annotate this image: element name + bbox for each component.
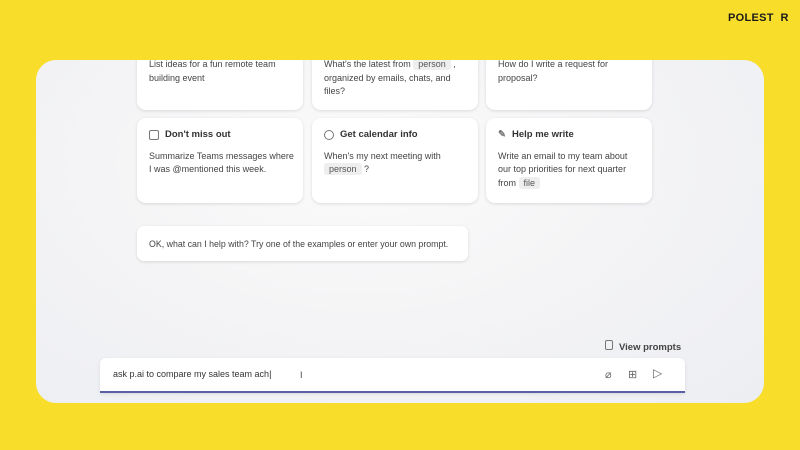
card: team building: [137, 20, 303, 110]
input box: I: [300, 370, 303, 380]
card: help me write: ✎: [498, 129, 506, 140]
panel: chat window: [36, 60, 764, 403]
card: help me write: Help me write: [512, 129, 574, 140]
card: help me write: our top priorities for next quarter: [498, 164, 626, 174]
prompt bubble: [137, 226, 468, 261]
card: latest from person: files?: [324, 86, 345, 96]
card: don't miss out: Summarize Teams messages where: [149, 150, 294, 160]
input box: ⌀: [605, 369, 612, 381]
card: don't miss out: I was @mentioned this week.: [149, 164, 266, 174]
card: request for proposal: proposal?: [498, 72, 538, 82]
input box: [100, 358, 685, 393]
input box: ask p.ai to compare my sales team ach|: [113, 369, 271, 379]
card: don't miss out: Don't miss out: [165, 129, 231, 140]
card: team building: building event: [149, 72, 205, 82]
card: get calendar info: person ?: [329, 164, 369, 174]
logo: POLEST R: [728, 12, 789, 24]
input box: ▷: [653, 366, 662, 380]
card: get calendar info: When's my next meeting with: [324, 150, 441, 160]
card: don't miss out: [137, 118, 303, 203]
card: latest from person: organized by emails, chats, and: [324, 72, 451, 82]
view prompts: View prompts: [619, 342, 681, 353]
card: help me write: from file: [498, 178, 535, 188]
card: latest from person: [312, 20, 478, 110]
input box: ⊞: [628, 369, 637, 381]
card: get calendar info: [312, 118, 478, 203]
view prompts: [605, 340, 681, 353]
card: help me write: [486, 118, 652, 203]
card: help me write: Write an email to my team about: [498, 150, 627, 160]
card: request for proposal: [486, 20, 652, 110]
card: get calendar info: Get calendar info: [340, 129, 418, 140]
prompt bubble: OK, what can I help with? Try one of the examples or enter your own prompt.: [149, 239, 448, 249]
